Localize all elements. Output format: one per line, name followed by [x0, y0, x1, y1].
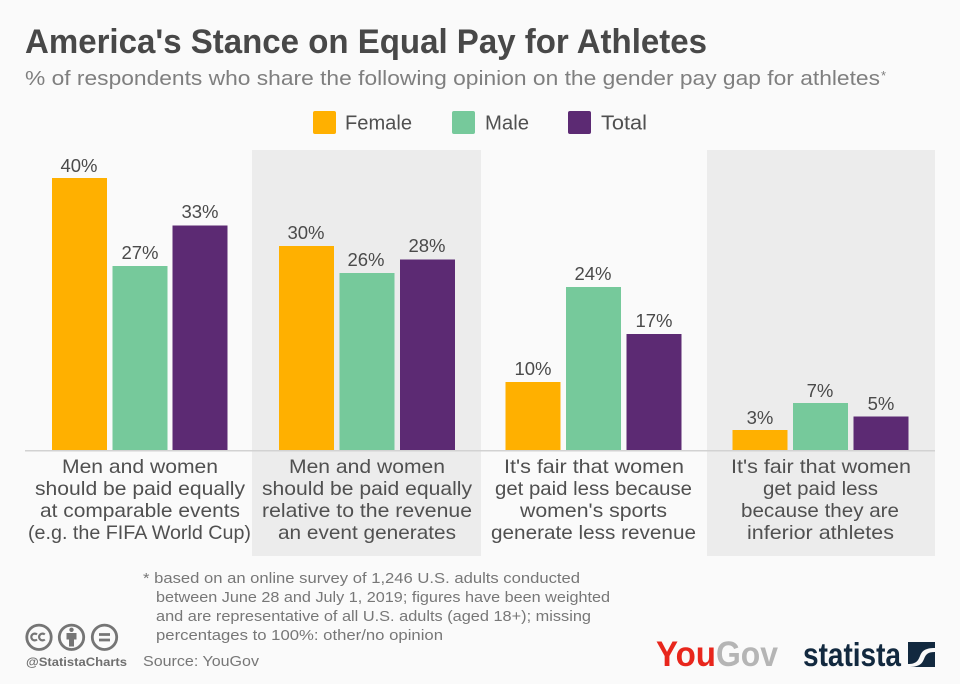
logo: YouGov: Gov: [716, 635, 778, 674]
panel: shaded column 2: [252, 150, 481, 556]
category label 2: [262, 456, 472, 544]
bar group: relative to revenue: 30%: [287, 222, 325, 243]
footnote: and are representative of all U.S. adults (aged 18+); missing: [156, 609, 591, 625]
source: Source: YouGov: [143, 654, 260, 670]
category label 3: It's fair that women: [504, 456, 684, 478]
category label 1: should be paid equally: [35, 478, 245, 500]
legend: [313, 111, 647, 134]
title: America's Stance on Equal Pay for Athletes: [25, 23, 707, 61]
bar group: inferior athletes: 3%: [747, 407, 773, 428]
logo: YouGov: You: [656, 635, 716, 674]
bar group: comparable events: 27%: [121, 242, 159, 263]
category label 1: at comparable events: [40, 500, 240, 522]
bar group: comparable events: 40%: [60, 155, 98, 176]
category label 4: [731, 456, 911, 544]
category label 3: women's sports: [519, 500, 667, 522]
category label 1: (e.g. the FIFA World Cup): [28, 522, 251, 544]
bar group: less revenue: 24%: [574, 263, 612, 284]
category label 2: Men and women: [289, 456, 445, 478]
footnote: * based on an online survey of 1,246 U.S. adults conducted: [143, 571, 580, 587]
bar group: comparable events: 33%: [181, 201, 219, 222]
bar group: relative to revenue: 26%: [347, 249, 385, 270]
bar group: less revenue: [506, 263, 682, 450]
category label 4: get paid less: [763, 478, 878, 500]
panel: shaded column 4: [707, 150, 935, 556]
logo: statista: statista: [803, 636, 902, 673]
category label 4: because they are: [741, 500, 899, 522]
category label 2: should be paid equally: [262, 478, 472, 500]
icon: creative commons licence: [27, 625, 117, 650]
category label 2: relative to the revenue: [262, 500, 472, 522]
bar group: relative to revenue: [279, 222, 455, 450]
category label 4: It's fair that women: [731, 456, 911, 478]
bar group: inferior athletes: [732, 380, 908, 450]
legend: Female: [345, 112, 412, 134]
footnote: between June 28 and July 1, 2019; figures have been weighted: [156, 590, 610, 606]
category label 3: [491, 456, 696, 544]
category label 3: get paid less because: [495, 478, 692, 500]
footnote: percentages to 100%: other/no opinion: [156, 628, 443, 644]
footnote: [143, 571, 610, 644]
bar group: inferior athletes: 5%: [868, 393, 894, 414]
category label 4: inferior athletes: [747, 522, 894, 544]
logo: YouGov: [656, 635, 778, 674]
legend: Total: [601, 112, 647, 134]
handle: @StatistaCharts: [26, 655, 127, 669]
subtitle: *: [881, 68, 886, 83]
bar group: less revenue: 17%: [635, 310, 673, 331]
bar group: less revenue: 10%: [514, 358, 552, 379]
category label 1: [28, 456, 251, 544]
category label 3: generate less revenue: [491, 522, 696, 544]
subtitle: % of respondents who share the following opinion on the gender pay gap for athletes: [25, 67, 880, 90]
axis line: [25, 450, 935, 452]
category label 2: an event generates: [278, 522, 456, 544]
bar group: inferior athletes: 7%: [807, 380, 833, 401]
bar group: comparable events: [52, 155, 228, 450]
category label 1: Men and women: [62, 456, 218, 478]
bar group: relative to revenue: 28%: [408, 235, 446, 256]
legend: Male: [485, 112, 529, 134]
